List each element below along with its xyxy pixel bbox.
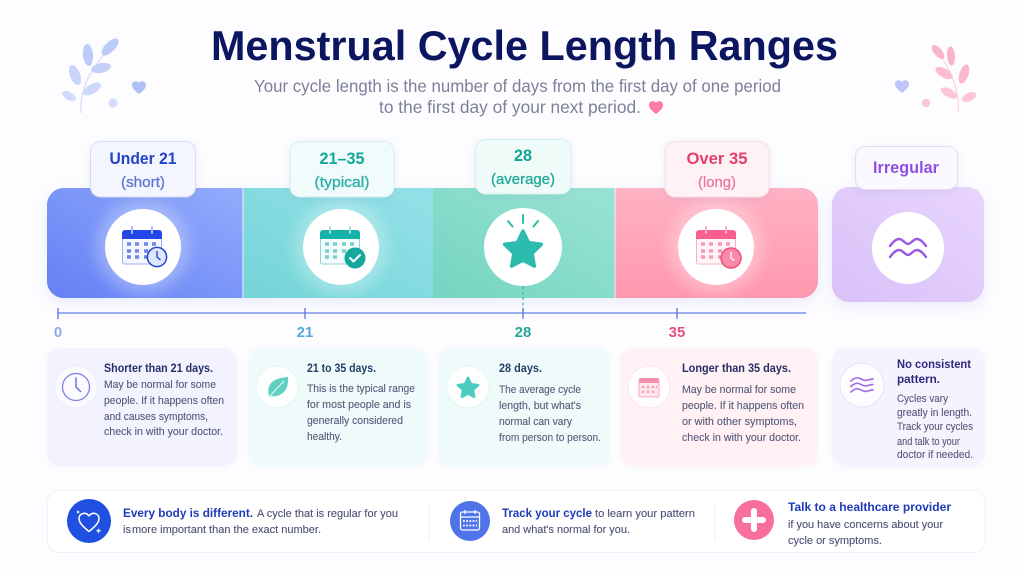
icon: calendar with clock (long) [678,209,754,285]
card: no consistent pattern: doctor if needed. [897,449,973,461]
icon: clock [55,366,97,408]
icon: waves [840,363,884,407]
card: no consistent pattern: Cycles vary [897,393,948,405]
card: 21 to 35 days: for most people and is [307,399,411,411]
icon: star [484,208,562,286]
card: no consistent pattern: greatly in length. [897,407,972,419]
tab: 21 to 35: (typical) [314,174,370,191]
takeaway: track your cycle: to learn your pattern [595,508,695,520]
decoration: pink dot [922,99,930,107]
takeaway: talk to a healthcare provider: Talk to a healthcare provider [788,500,951,514]
takeaway: every body is different: Every body is different. [123,506,253,520]
panel: takeaways [48,490,985,552]
card: 28 days: length, but what's [499,400,581,412]
card: shorter than 21 days: May be normal for some [104,379,216,391]
tab: over 35: Over 35 [686,150,748,168]
decoration: pink leaf sprig [929,43,978,113]
tab: 28 average: 28 [514,147,532,165]
card: 28 days: normal can vary [499,416,572,428]
icon: pink heart [649,101,663,114]
decoration: blue heart [132,81,146,94]
card: no consistent pattern: pattern. [897,372,940,386]
axis label: 0: 0 [54,324,62,341]
card: 21 to 35 days: generally considered [307,415,403,427]
range bar [47,188,818,298]
decoration: blue dot [108,98,118,108]
segment: 21 to 35 [243,188,433,298]
tab: under 21 [90,142,196,197]
takeaway: every body is different: is [123,524,131,536]
card: shorter than 21 days: Shorter than 21 days. [104,363,213,375]
axis: day scale [54,308,806,341]
tab: over 35: (long) [698,174,736,191]
card: no consistent pattern: No consistent [897,357,971,371]
card: 28 days: The average cycle [499,384,581,396]
decoration: blue leaf sprig [61,36,121,113]
axis label: 28: 28 [515,324,531,341]
card: shorter than 21 days: people. If it happens often [104,395,224,407]
card: no consistent pattern: Track your cycles [897,421,973,433]
segment: under 21 [47,188,243,298]
takeaway: every body is different: more important than the exact number. [132,524,321,536]
tab: under 21: (short) [121,174,165,191]
card: shorter than 21 days [47,348,236,466]
card: longer than 35 days: Longer than 35 days. [682,363,791,375]
axis label: 21: 21 [297,324,313,341]
icon: star [447,366,489,408]
card: 21 to 35 days [248,348,428,466]
subtitle: Your cycle length is the number of days from the first day of one period [254,76,781,96]
takeaway: track your cycle: Track your cycle [502,506,592,520]
tab: irregular [856,146,958,190]
card: longer than 35 days [620,348,818,466]
tab: 21 to 35 [290,142,394,197]
card: longer than 35 days: check in with your doctor. [682,432,801,444]
takeaway: every body is different [67,499,398,543]
card: 28 days [438,348,610,466]
icon: calendar with check [303,209,379,285]
takeaway: track your cycle: and what's normal for you. [502,524,630,536]
takeaway: every body is different: A cycle that is regular for you [257,508,398,520]
icon: calendar [450,501,490,541]
icon: heart with sparkles [67,499,111,543]
card: longer than 35 days: people. If it happens often [682,400,804,412]
card: longer than 35 days: or with other symptoms, [682,416,797,428]
takeaway: talk to a healthcare provider: cycle or symptoms. [788,535,882,547]
icon: calendar [628,366,670,408]
card: 28 days: from person to person. [499,432,601,444]
card: shorter than 21 days: check in with your doctor. [104,426,223,438]
takeaway: talk to a healthcare provider: if you have concerns about your [788,519,943,531]
panel: irregular [832,187,984,302]
card: longer than 35 days: May be normal for some [682,384,796,396]
takeaway: talk to a healthcare provider [734,500,951,547]
subtitle [254,76,781,117]
card: no consistent pattern [832,348,985,466]
card: shorter than 21 days: and causes symptoms, [104,411,208,423]
tab: over 35 [665,142,769,197]
card: 21 to 35 days: This is the typical range [307,383,415,395]
title: Menstrual Cycle Length Ranges [211,22,838,69]
card: 21 to 35 days: healthy. [307,431,342,443]
card: no consistent pattern: and talk to your [897,436,960,448]
tab: under 21: Under 21 [110,150,176,168]
segment: over 35 [615,188,818,298]
tab: 21 to 35: 21–35 [320,150,364,168]
segment: 28 average [433,188,615,298]
card: 21 to 35 days: 21 to 35 days. [307,363,376,375]
axis label: 35: 35 [669,324,685,341]
icon: plus [734,500,774,540]
marker: dashed line to 28 [522,286,524,313]
tab: 28 average: (average) [491,171,555,188]
takeaway: track your cycle [450,501,695,541]
icon: leaf [256,366,298,408]
icon: irregular waves [872,212,944,284]
subtitle: to the first day of your next period. [379,97,641,117]
decoration: lilac heart [895,80,909,93]
tab: irregular: Irregular [873,159,940,177]
card: 28 days: 28 days. [499,363,542,375]
tab: 28 average [476,140,571,194]
icon: calendar with clock [105,209,181,285]
